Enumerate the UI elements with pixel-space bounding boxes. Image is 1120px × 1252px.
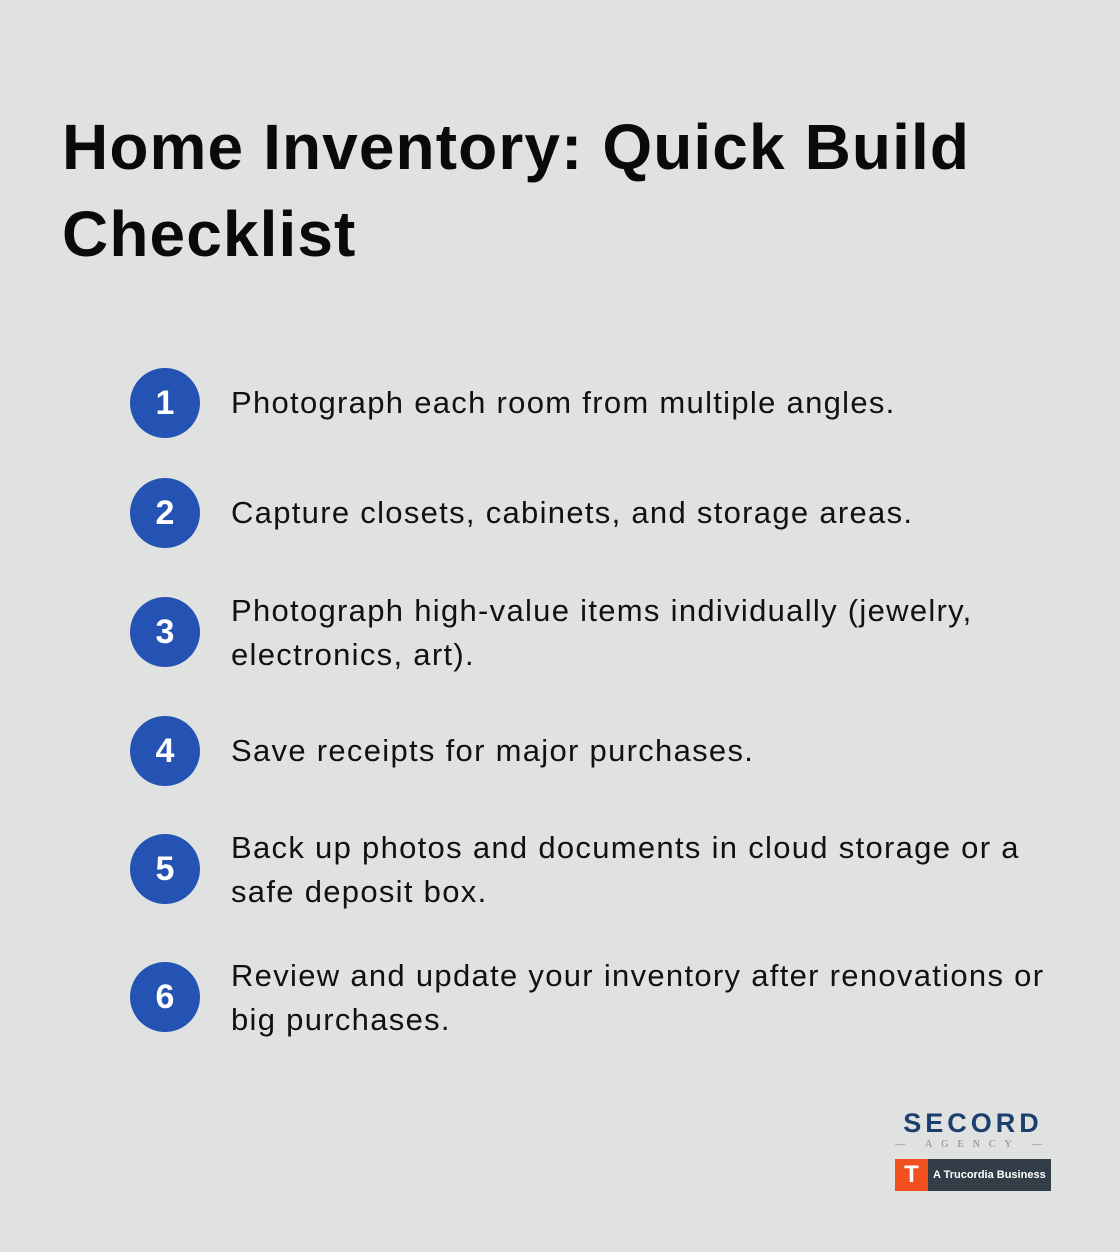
logo (895, 1108, 1051, 1191)
title: Checklist (62, 198, 356, 270)
item 5: safe deposit box. (231, 874, 487, 909)
title (62, 111, 970, 270)
item 4: Save receipts for major purchases. (231, 733, 754, 768)
item 6: big purchases. (231, 1002, 451, 1037)
item 3: electronics, art). (231, 637, 475, 672)
item 2: 2 (156, 494, 174, 532)
logo: A Trucordia Business (933, 1169, 1046, 1181)
item 3: Photograph high-value items individually (jewelry, (231, 593, 973, 628)
title: Home Inventory: Quick Build (62, 111, 970, 183)
item 1 (130, 368, 896, 438)
item 5 (130, 830, 1020, 909)
item 2: Capture closets, cabinets, and storage areas. (231, 495, 913, 530)
item 1: Photograph each room from multiple angles. (231, 385, 896, 420)
logo: — AGENCY — (895, 1139, 1051, 1150)
logo: T (904, 1161, 919, 1188)
item 6: Review and update your inventory after renovations or (231, 958, 1044, 993)
item 4: 4 (156, 732, 174, 770)
item 5: 5 (156, 850, 174, 888)
item 6: 6 (156, 978, 174, 1016)
item 6 (130, 958, 1044, 1037)
item 5: Back up photos and documents in cloud storage or a (231, 830, 1020, 865)
item 1: 1 (156, 384, 174, 422)
item 4 (130, 716, 754, 786)
logo: SECORD (903, 1108, 1043, 1138)
item 3 (130, 593, 973, 672)
item 3: 3 (156, 613, 174, 651)
item 2 (130, 478, 913, 548)
